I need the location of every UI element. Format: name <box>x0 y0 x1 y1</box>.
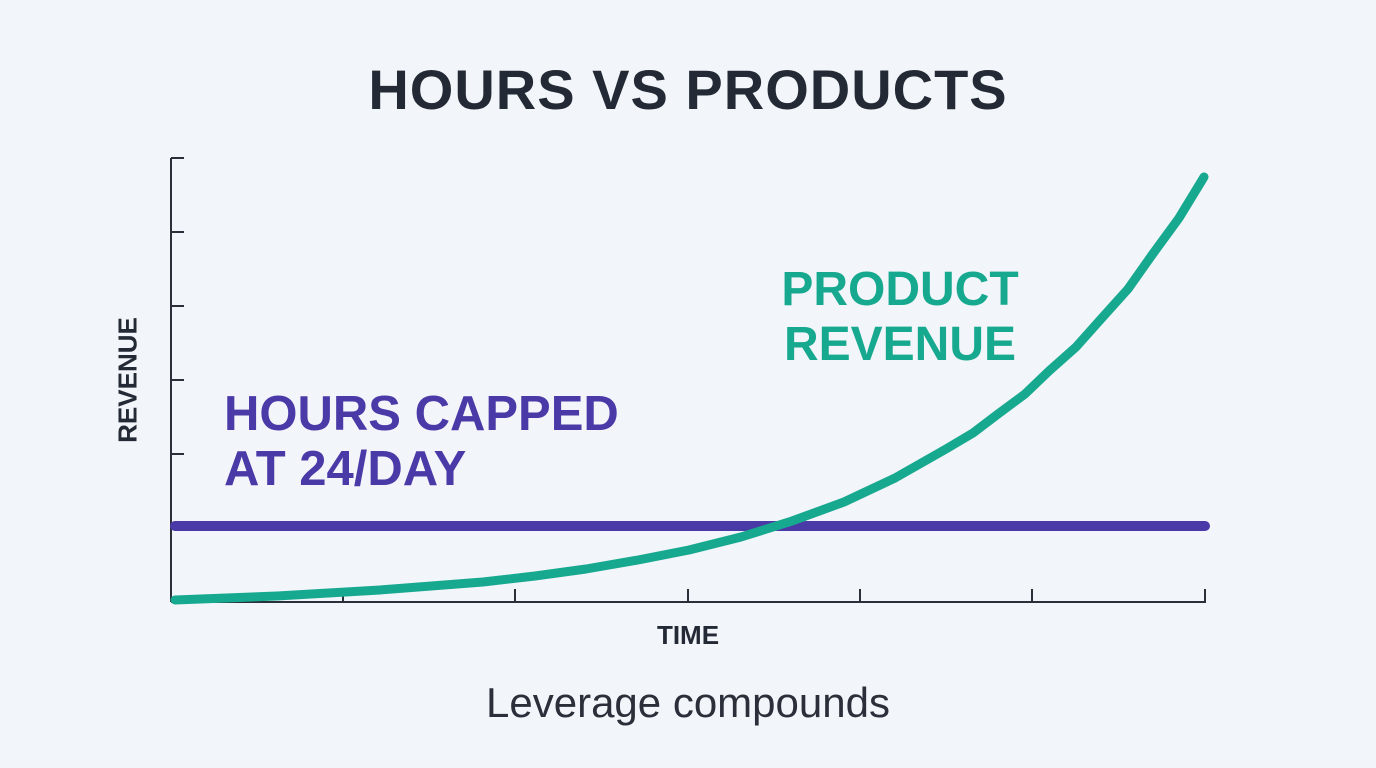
title: HOURS VS PRODUCTS <box>368 58 1008 121</box>
y-axis label: REVENUE <box>112 317 142 443</box>
label: hours capped: HOURS CAPPED <box>224 387 619 441</box>
y axis <box>171 158 184 602</box>
x-axis label: TIME <box>657 620 719 650</box>
label: product revenue: PRODUCT <box>781 263 1019 316</box>
product revenue curve <box>175 177 1204 600</box>
label: product revenue <box>781 263 1019 371</box>
label: hours capped: AT 24/DAY <box>224 442 466 496</box>
label: product revenue: REVENUE <box>784 318 1016 371</box>
caption: Leverage compounds <box>486 679 890 726</box>
hours line <box>175 521 1205 531</box>
label: hours capped <box>224 387 619 496</box>
x axis <box>171 589 1206 602</box>
